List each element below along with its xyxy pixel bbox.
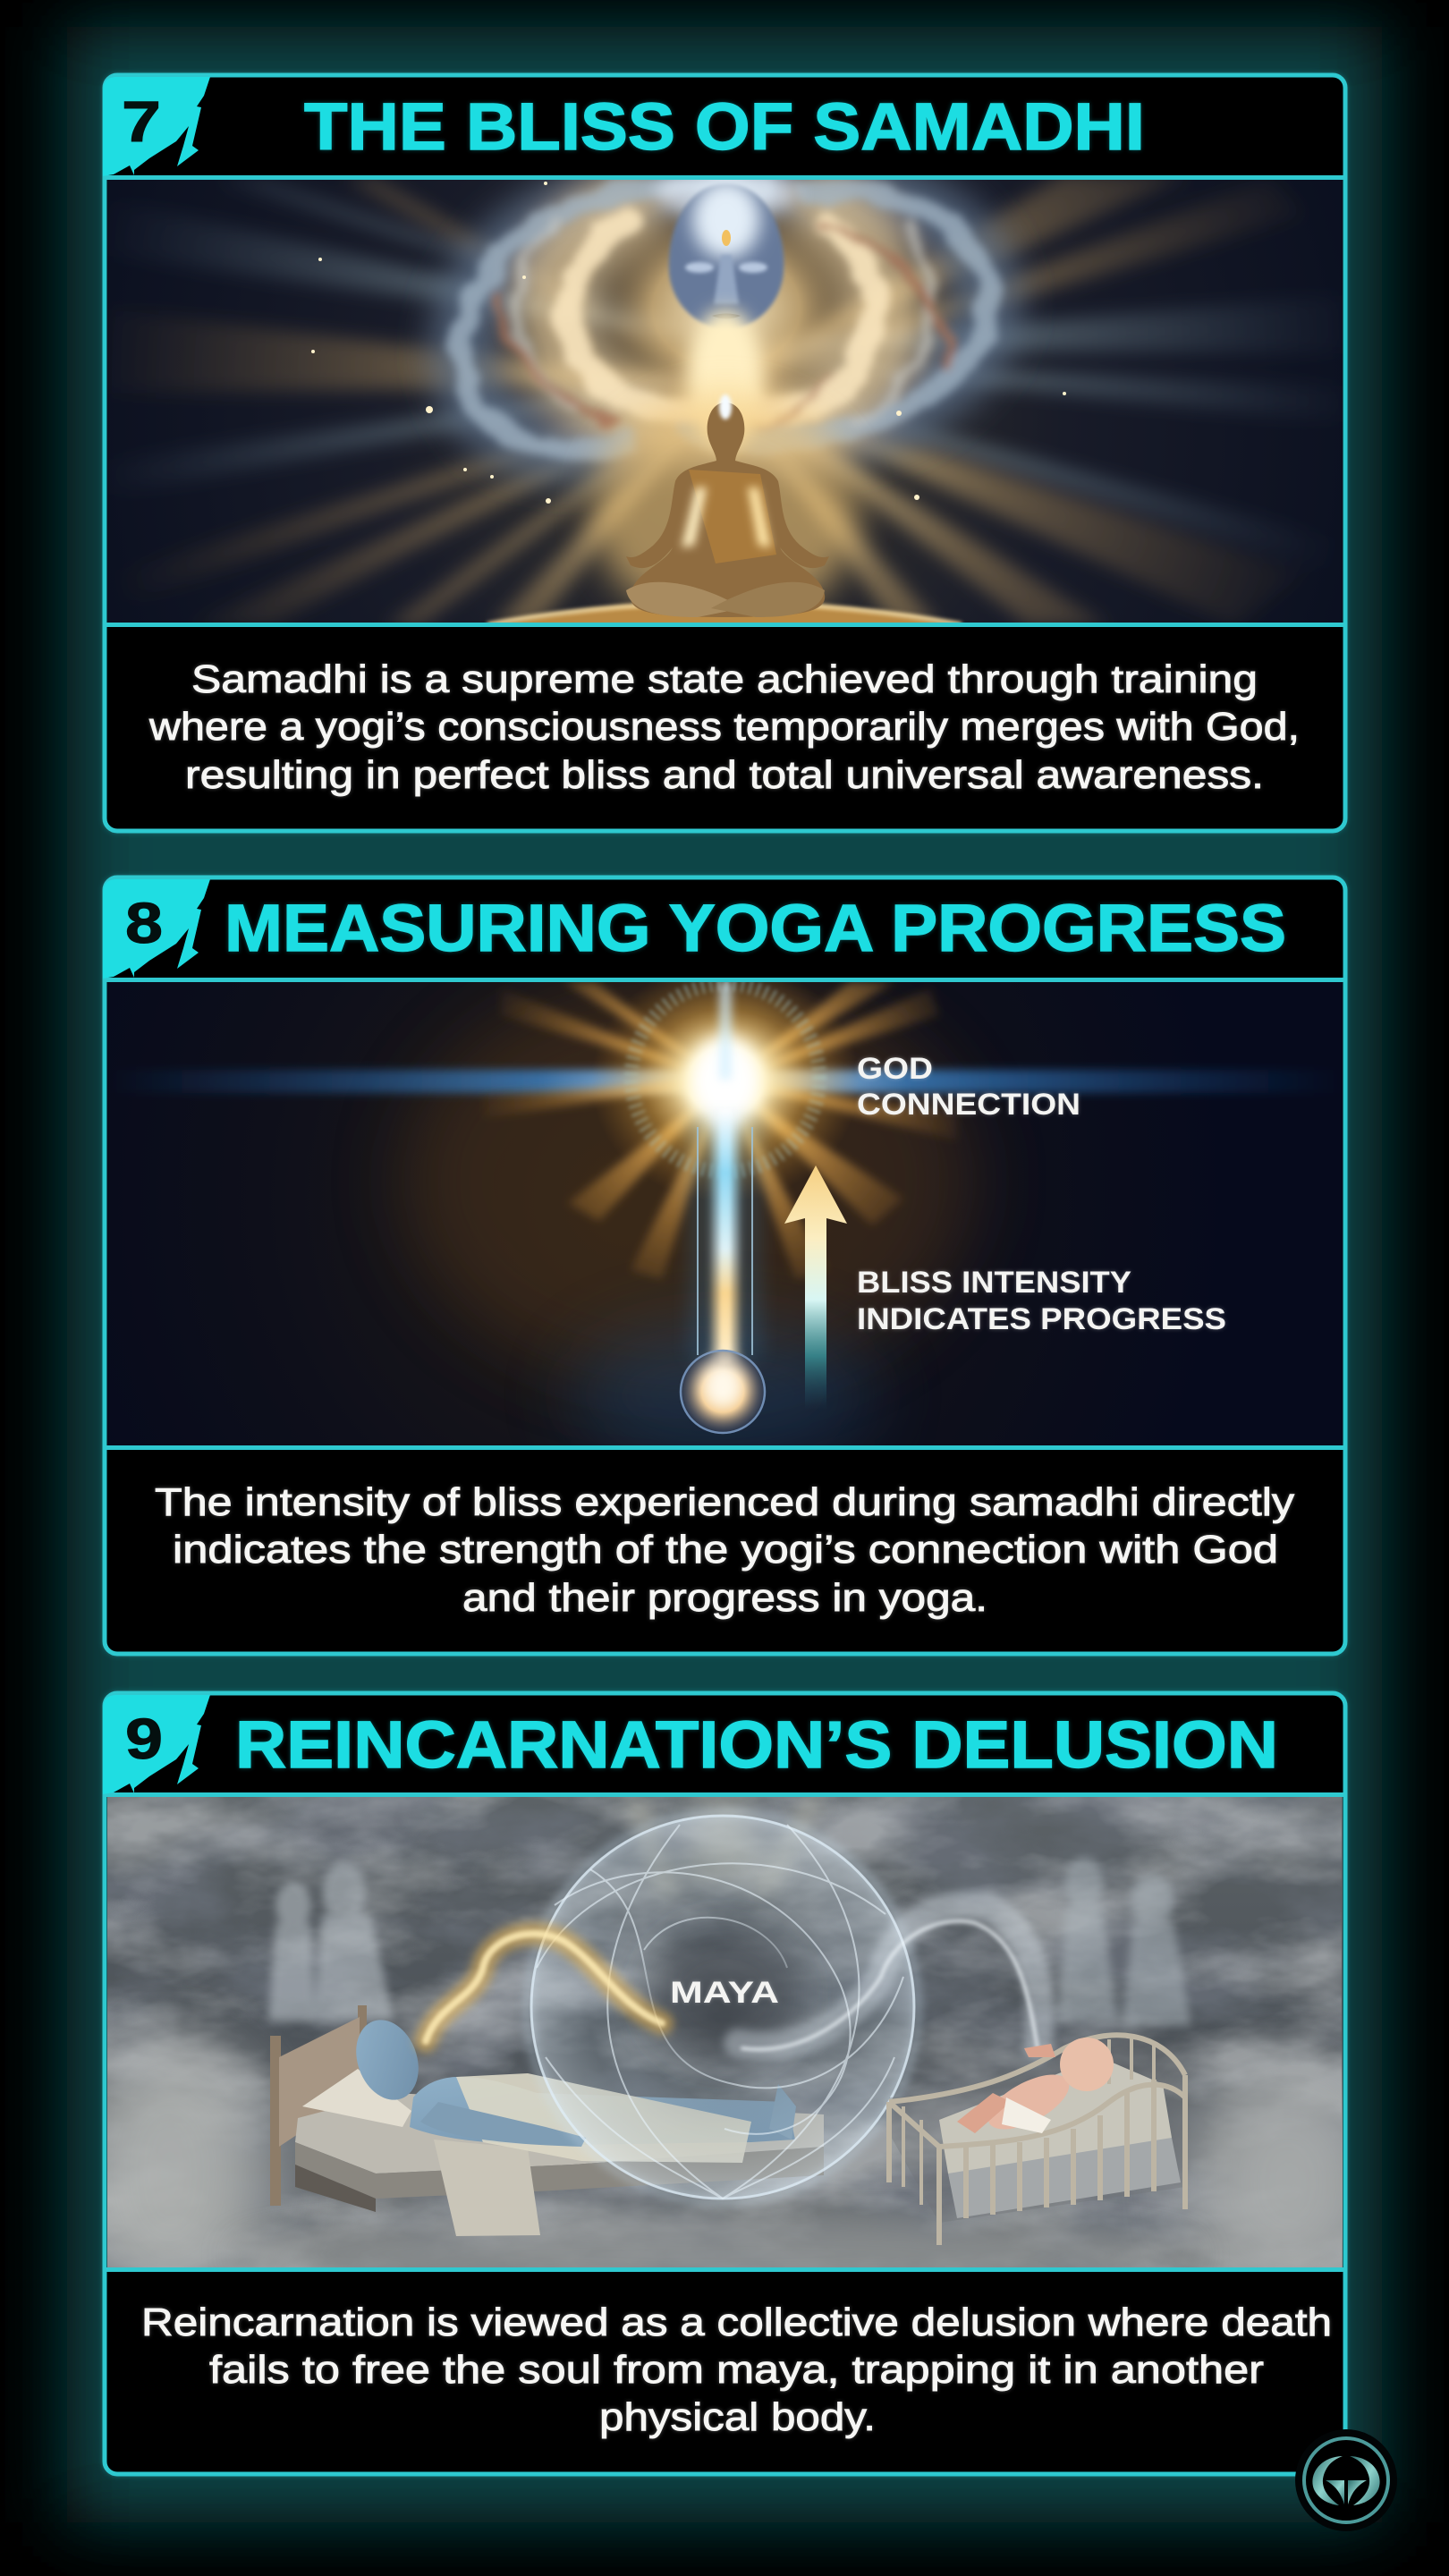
label: maya: MAYA [670,1976,779,2010]
stars [311,182,1066,504]
glowing ground arc [498,603,950,623]
header divider lines [105,1792,1345,2272]
title: MEASURING YOGA PROGRESS [225,891,1286,965]
energy beam [688,309,763,452]
galaxy [462,185,988,449]
description text: indicates the strength of the yogi’s connection with God [173,1528,1278,1572]
number tab 9: 9 [125,1707,163,1771]
label: bliss intensity: BLISS INTENSITY [857,1266,1131,1300]
description text: where a yogi’s consciousness temporarily merges with God, [148,705,1300,749]
label: god connection [857,1052,1080,1122]
newborn in crib [889,2035,1185,2245]
thermometer [681,1109,765,1433]
meditating yogi [626,394,829,617]
header divider lines [105,175,1345,627]
title: REINCARNATION’S DELUSION [235,1707,1278,1782]
description text [148,657,1300,797]
number tab 7: 7 [122,89,161,154]
illustration: meditating yogi merging with cosmic face [107,165,1343,626]
description text: resulting in perfect bliss and total universal awareness. [185,753,1264,797]
hospital bed [270,2005,824,2236]
number tab 7 [103,77,210,176]
ghost figures left [268,1863,394,2021]
description text [141,2301,1332,2439]
description text: The intensity of bliss experienced during samadhi directly [155,1480,1294,1524]
cosmic face [655,165,798,329]
clouds [72,1796,1386,2308]
illustration: bliss thermometer and star [107,961,1343,1467]
logo emblem [1295,2429,1397,2531]
number tab 9 [103,1695,210,1794]
horizontal lens flare [107,1070,1343,1093]
header divider lines [105,978,1345,1450]
label: god connection: GOD [857,1052,933,1086]
label: bliss intensity [857,1266,1226,1336]
maya sphere [528,1812,918,2202]
ghost figures right [1057,1858,1191,2026]
arrow up [784,1165,847,1410]
description text: Samadhi is a supreme state achieved through training [191,657,1258,701]
number tab 8: 8 [125,891,163,955]
golden soul wisp [426,1934,662,2041]
panel 7: the bliss of samadhi [103,75,1345,831]
light rays [107,174,1342,626]
panel 8: measuring yoga progress [103,877,1345,1654]
label: god connection: CONNECTION [857,1088,1080,1122]
illustration: death, maya sphere, rebirth [72,1796,1386,2308]
description text [155,1480,1294,1620]
deceased body [345,2011,796,2163]
label: bliss intensity: INDICATES PROGRESS [857,1302,1226,1336]
number tab 8 [103,879,210,979]
panel 9: reincarnation's delusion [72,1693,1386,2474]
description text: Reincarnation is viewed as a collective delusion where death [141,2301,1332,2344]
description text: physical body. [599,2395,876,2439]
title: THE BLISS OF SAMADHI [304,89,1145,164]
description text: and their progress in yoga. [462,1576,987,1620]
description text: fails to free the soul from maya, trapping it in another [209,2348,1264,2392]
sparkle ring [631,984,819,1172]
silver soul wisp [738,1904,1039,2049]
gold starburst rays [483,982,957,1279]
